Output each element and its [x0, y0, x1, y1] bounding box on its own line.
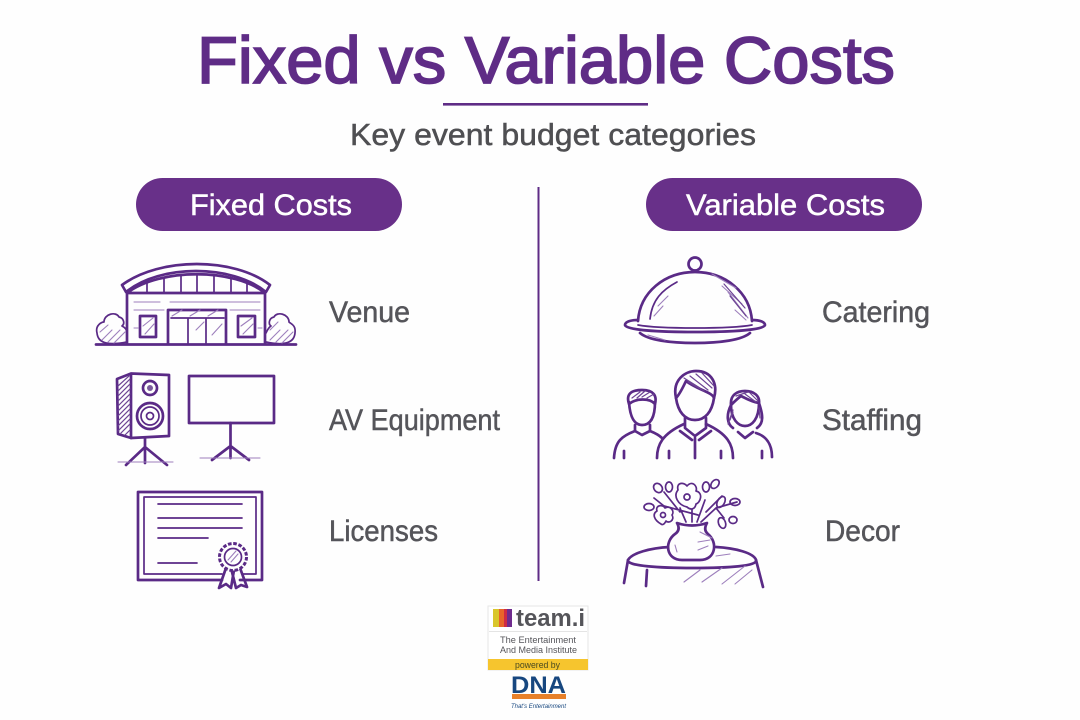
heading: Variable Costs: Variable Costs: [686, 189, 885, 222]
icon: catering cloche: [625, 258, 765, 343]
icon: decor vase on table: [624, 478, 763, 587]
logo: team.i powered by DNA: DNA: [511, 672, 566, 699]
icon: venue building: [96, 264, 296, 344]
logo: team.i powered by DNA: And Media Institute: [500, 645, 577, 656]
logo: team.i powered by DNA: The Entertainment: [500, 635, 576, 646]
subtitle: Key event budget categories: [350, 117, 756, 152]
heading: Fixed Costs: [136, 178, 402, 231]
logo: team.i powered by DNA: [488, 605, 588, 710]
label: Staffing: Staffing: [822, 404, 922, 437]
icon: speaker and projector screen: [117, 374, 274, 465]
label: Decor: Decor: [825, 515, 900, 548]
logo: team.i powered by DNA: team.i: [516, 605, 585, 632]
title: Fixed vs Variable Costs: [197, 23, 895, 97]
heading: Variable Costs: [646, 178, 922, 231]
label: AV Equipment: AV Equipment: [329, 404, 501, 437]
label: Licenses: Licenses: [329, 515, 438, 548]
label: Venue: Venue: [329, 296, 410, 329]
logo: team.i powered by DNA: powered by: [515, 660, 560, 670]
icon: staff group: [614, 371, 772, 458]
logo: team.i powered by DNA: That's Entertainment: [511, 704, 566, 710]
label: Catering: Catering: [822, 296, 930, 329]
icon: license certificate: [138, 492, 262, 588]
heading: Fixed Costs: Fixed Costs: [190, 189, 352, 222]
